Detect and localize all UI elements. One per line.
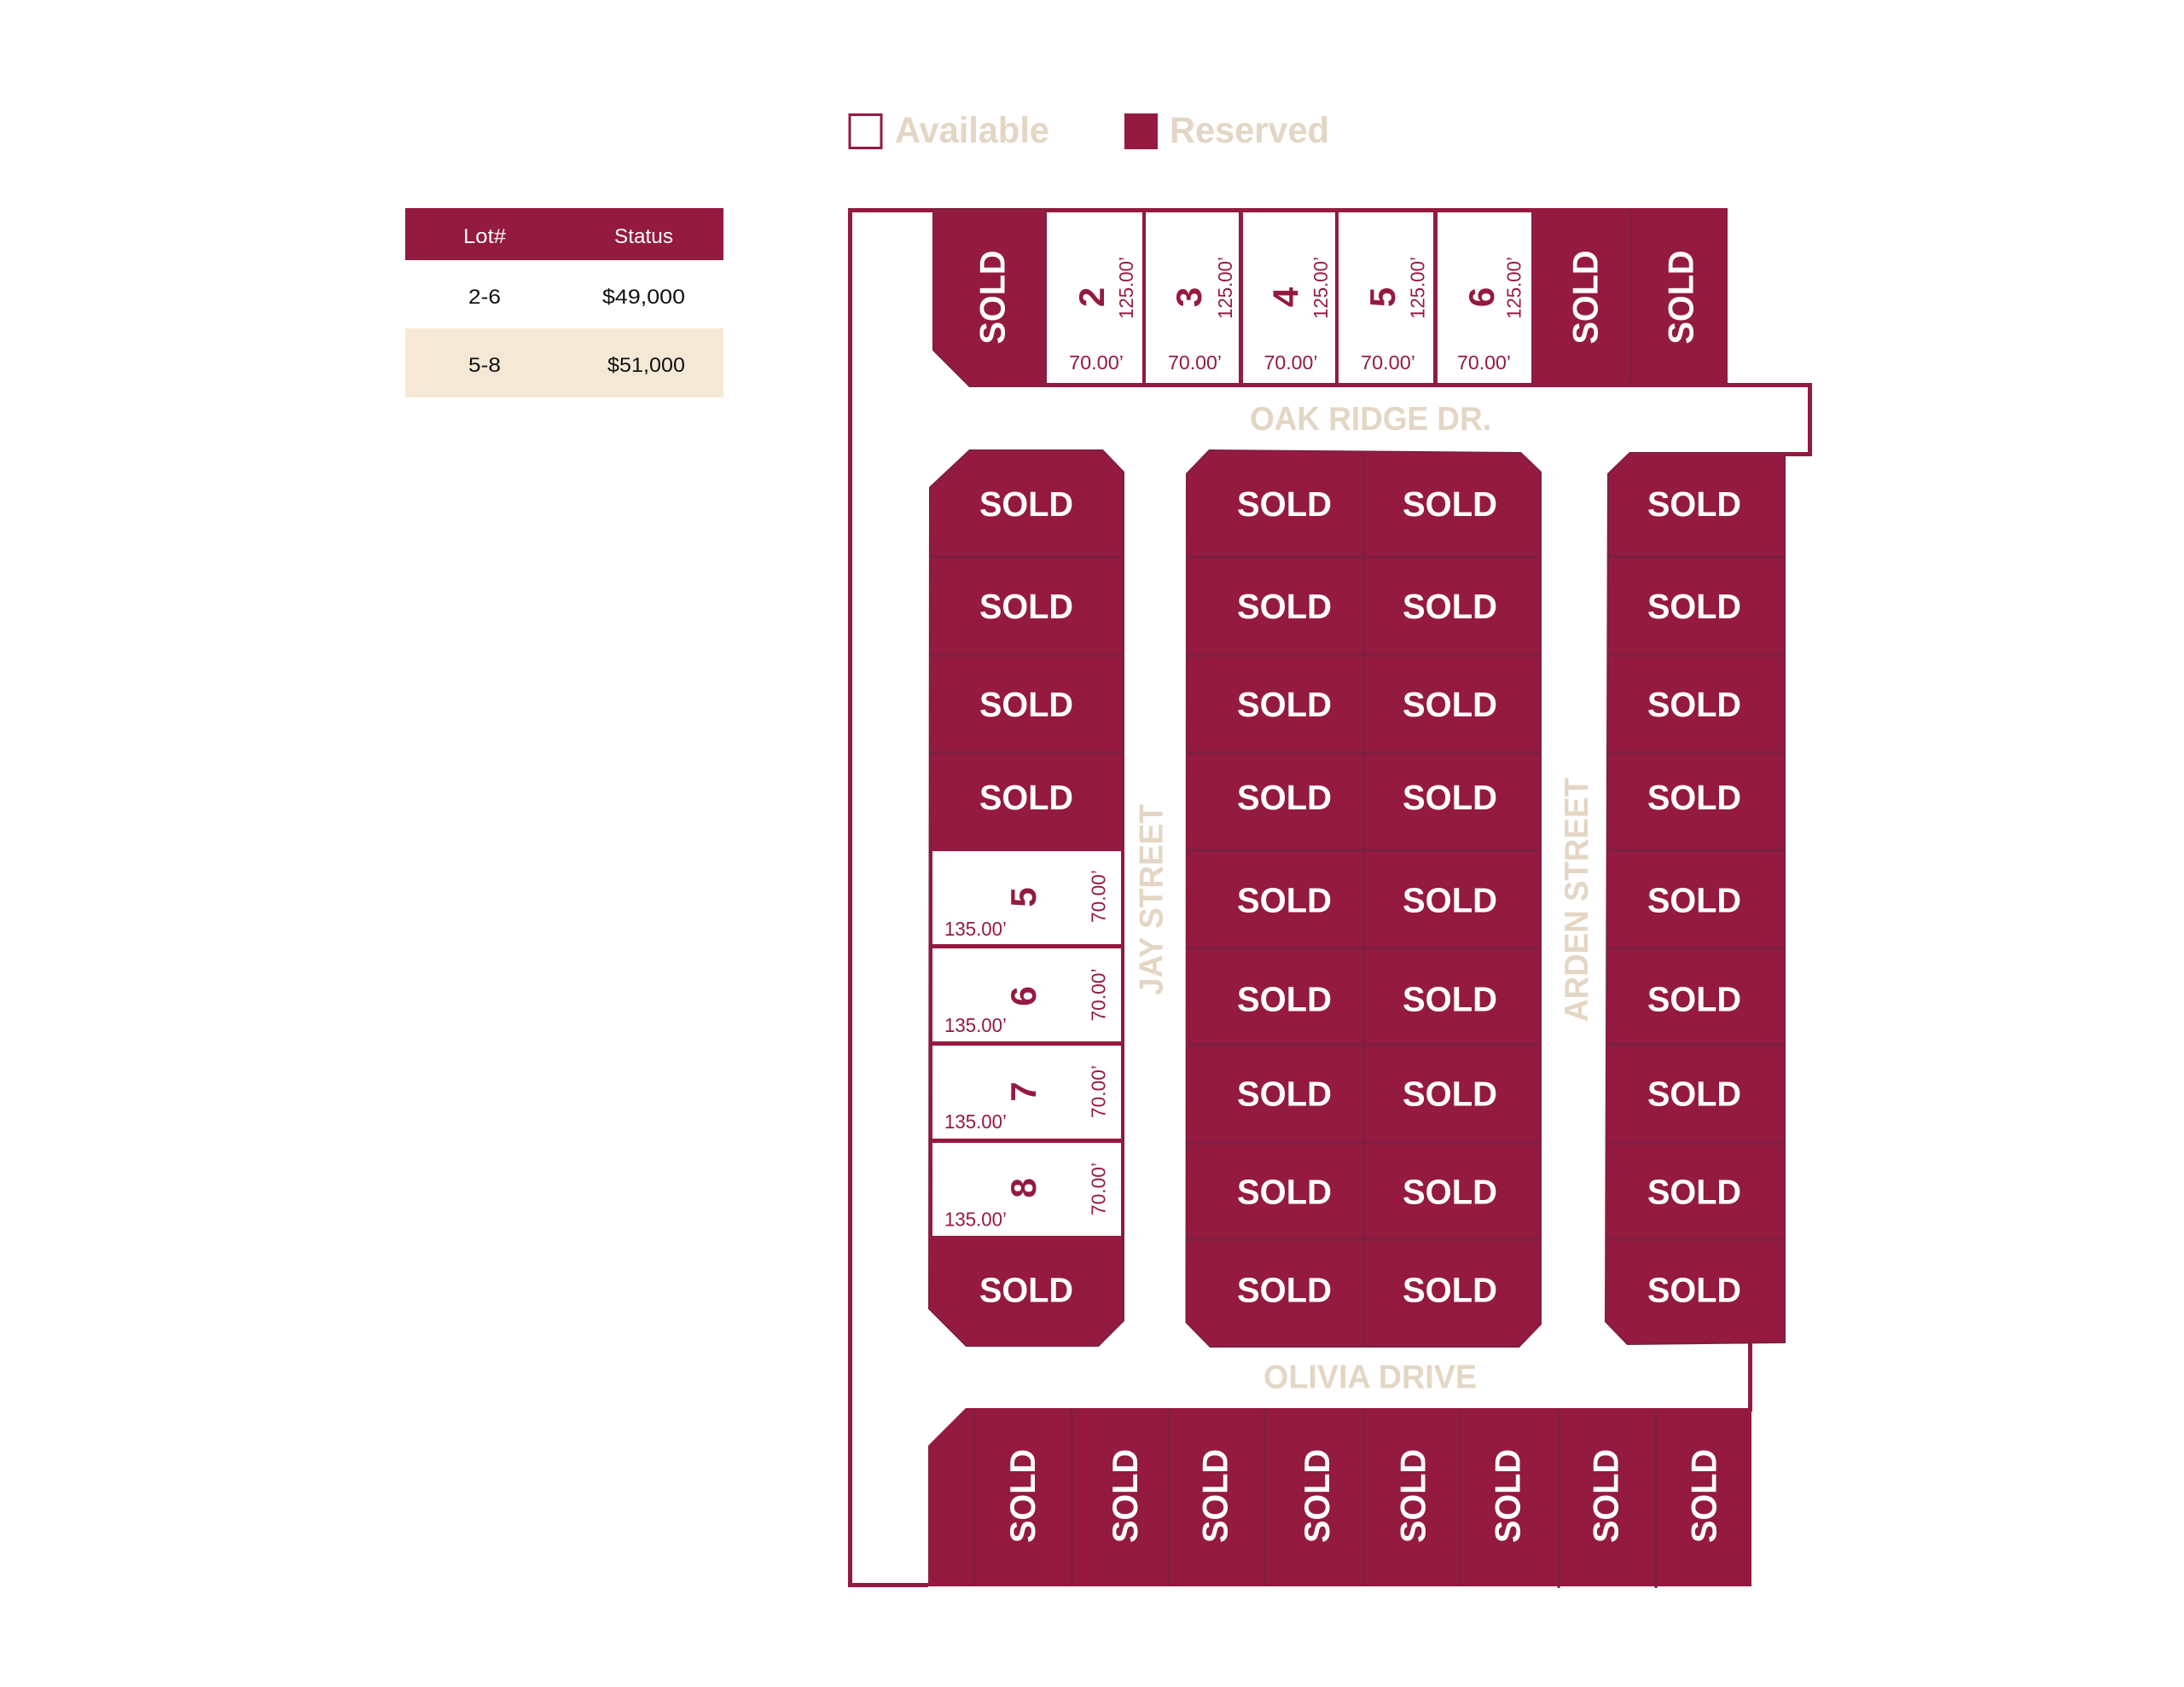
lot: sold <box>1531 208 1728 387</box>
sold labels, second column: SOLD <box>1403 979 1497 1018</box>
table header <box>405 208 723 260</box>
sold labels: SOLD <box>1297 1449 1337 1543</box>
price table <box>405 208 723 397</box>
sold labels, first column: SOLD <box>1237 778 1332 817</box>
lot 6 <box>932 948 1121 1041</box>
table header: Status <box>614 225 673 248</box>
sold labels <box>979 484 1073 1310</box>
sold labels: SOLD <box>1647 685 1741 724</box>
street label: arden street: ARDEN STREET <box>1559 778 1595 1022</box>
lot 6: 6 <box>1461 287 1502 307</box>
legend: available swatch <box>850 114 881 148</box>
bottom lot row <box>928 1408 1751 1588</box>
lot 7: 135.00’ <box>944 1110 1007 1133</box>
legend: reserved swatch <box>1124 113 1158 149</box>
sold labels, second column: SOLD <box>1403 484 1497 524</box>
right lot column <box>1606 453 1785 1344</box>
sold labels: SOLD <box>1647 484 1741 524</box>
lot: sold corner <box>933 209 1047 386</box>
sold labels, first column: SOLD <box>1237 1172 1332 1211</box>
table row: lots 2-6: $49,000 <box>602 286 685 309</box>
middle lot block <box>1186 450 1541 1347</box>
street label: jay street: JAY STREET <box>1133 804 1170 995</box>
lot 6: 125.00’ <box>1503 257 1525 319</box>
sold labels, second column: SOLD <box>1403 1271 1497 1310</box>
lot 6: 70.00’ <box>1457 351 1511 374</box>
sold labels, first column: SOLD <box>1237 1075 1332 1114</box>
legend: reserved label: Reserved <box>1170 110 1329 151</box>
lot 3 <box>1146 212 1239 383</box>
sold labels, first column: SOLD <box>1237 685 1332 724</box>
sold labels, second column: SOLD <box>1403 1172 1497 1211</box>
lot 7: 70.00’ <box>1087 1065 1109 1118</box>
lot 2 <box>1047 212 1142 383</box>
sold labels, second column <box>1403 484 1497 1310</box>
legend: available label: Available <box>895 110 1049 151</box>
oak ridge road outline <box>1531 383 1812 456</box>
table row: lots 2-6: 2-6 <box>468 286 501 309</box>
sold labels: SOLD <box>1392 1449 1433 1543</box>
lot 5: 125.00’ <box>1406 257 1428 319</box>
lot 2: 70.00’ <box>1069 351 1124 374</box>
sold labels: SOLD <box>979 484 1073 524</box>
lot 5: 135.00’ <box>944 918 1007 940</box>
sold labels: SOLD <box>979 778 1073 817</box>
sold labels: SOLD <box>1647 778 1741 817</box>
lot: sold: SOLD <box>1660 251 1701 345</box>
sold labels: SOLD <box>1002 1449 1043 1543</box>
lot 4: 4 <box>1266 287 1305 307</box>
lot 5: 5 <box>1362 287 1403 307</box>
sold labels, second column: SOLD <box>1403 685 1497 724</box>
table row: lots 5-8: 5-8 <box>468 354 501 377</box>
lot 3: 3 <box>1169 287 1209 307</box>
lot 7 <box>932 1046 1121 1139</box>
lot 6: 135.00’ <box>944 1014 1007 1036</box>
lot 8: 70.00’ <box>1087 1162 1109 1215</box>
sold labels: SOLD <box>1647 1075 1741 1114</box>
sold labels: SOLD <box>1647 1271 1741 1310</box>
lot: sold: SOLD <box>1565 251 1606 345</box>
sold labels: SOLD <box>1488 1449 1527 1543</box>
lot 6: 70.00’ <box>1087 969 1109 1022</box>
sold labels: SOLD <box>1684 1449 1723 1543</box>
legend <box>850 110 1329 151</box>
lot 3: 125.00’ <box>1214 257 1236 319</box>
lot 7: 7 <box>1003 1081 1043 1102</box>
lot 6: 6 <box>1003 986 1043 1006</box>
lot 4 <box>1243 212 1335 383</box>
sold labels <box>1002 1449 1723 1543</box>
sold labels: SOLD <box>1647 979 1741 1018</box>
sold labels, second column: SOLD <box>1403 587 1497 626</box>
sold labels: SOLD <box>979 1271 1073 1310</box>
lot 2: 2 <box>1072 287 1112 307</box>
sold labels, second column: SOLD <box>1403 1075 1497 1114</box>
lot 5: 5 <box>1003 887 1043 907</box>
sold labels: SOLD <box>979 685 1073 724</box>
map outline <box>848 208 1728 1587</box>
sold labels: SOLD <box>1647 880 1741 919</box>
lot 2: 125.00’ <box>1115 257 1137 319</box>
sold labels, first column: SOLD <box>1237 1271 1332 1310</box>
sold labels: SOLD <box>1585 1449 1626 1543</box>
sold labels, first column: SOLD <box>1237 979 1332 1018</box>
sold labels, first column: SOLD <box>1237 484 1332 524</box>
sold labels, second column: SOLD <box>1403 778 1497 817</box>
sold labels, first column: SOLD <box>1237 880 1332 919</box>
lot 5 <box>1339 212 1433 383</box>
sold labels: SOLD <box>1647 587 1741 626</box>
lot 6 <box>1438 212 1531 383</box>
sold labels: SOLD <box>1647 1172 1741 1211</box>
site map <box>848 208 1812 1588</box>
lot 8: 135.00’ <box>944 1208 1007 1230</box>
lot 5: 70.00’ <box>1361 351 1415 374</box>
table header: Lot# <box>463 225 507 248</box>
lot: sold corner: SOLD <box>973 251 1012 345</box>
lot 3: 70.00’ <box>1168 351 1222 374</box>
sold labels: SOLD <box>979 587 1073 626</box>
sold labels, first column: SOLD <box>1237 587 1332 626</box>
table row: lots 2-6 <box>468 286 685 309</box>
lot 4: 70.00’ <box>1264 351 1317 374</box>
sold labels, second column: SOLD <box>1403 880 1497 919</box>
street label: oak ridge dr: OAK RIDGE DR. <box>1250 401 1491 438</box>
lot 5: 70.00’ <box>1087 870 1109 923</box>
table row: lots 5-8 <box>405 328 723 397</box>
left lot column <box>929 450 1124 1346</box>
sold labels, first column <box>1237 484 1332 1310</box>
lot 5 <box>932 851 1121 944</box>
sold labels <box>1647 484 1741 1310</box>
lot 8 <box>932 1143 1121 1236</box>
olivia drive wall <box>1748 1343 1752 1412</box>
top lot row <box>933 208 1728 387</box>
lot 8: 8 <box>1003 1178 1043 1198</box>
table row: lots 5-8: $51,000 <box>607 354 685 377</box>
sold labels: SOLD <box>1105 1449 1145 1543</box>
sold labels: SOLD <box>1194 1449 1235 1543</box>
available lots frame <box>1047 208 1531 387</box>
lot 4: 125.00’ <box>1310 257 1332 319</box>
street label: olivia drive: OLIVIA DRIVE <box>1263 1359 1477 1395</box>
